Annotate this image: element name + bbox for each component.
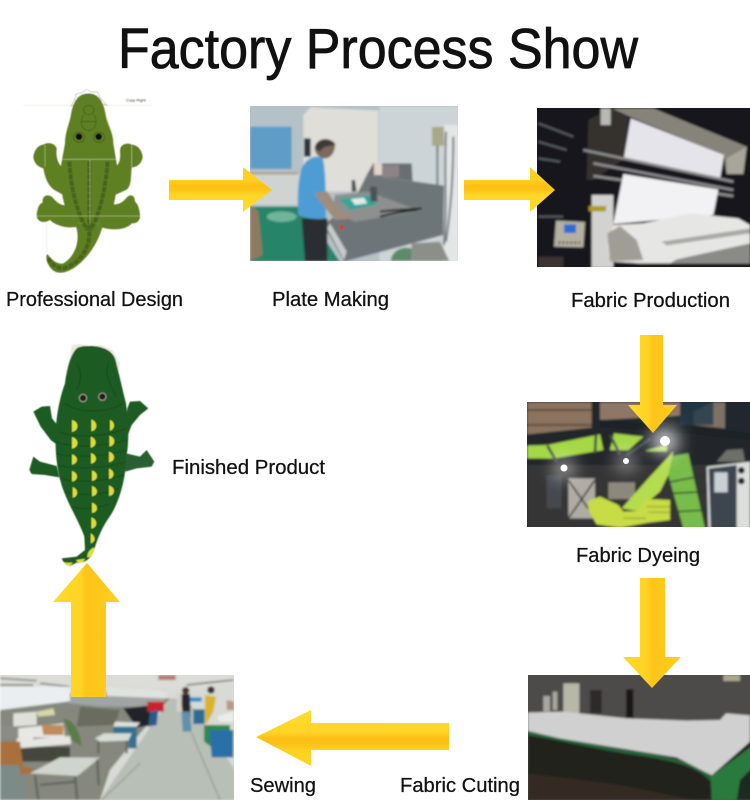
blue board: [250, 127, 292, 169]
white fabric roll: [624, 118, 724, 179]
label: sewing: Sewing: [250, 774, 316, 797]
arrow: design to plate making: [169, 167, 272, 212]
workstations left: [70, 690, 167, 707]
right lime fabric: [668, 453, 705, 528]
rollers: [583, 150, 733, 196]
lower background: [527, 465, 707, 528]
arrow: sewing to finished product: [53, 563, 120, 697]
column: [592, 195, 613, 268]
carton: [250, 205, 263, 261]
folded fabric pile: [607, 213, 750, 263]
machine side frame: [587, 108, 628, 180]
fur shading: [56, 363, 127, 508]
left white wall: [0, 685, 71, 710]
white fabric: [528, 712, 750, 775]
background equipment: [563, 683, 579, 713]
panel: fabric dyeing photo: [527, 402, 750, 527]
workers: [180, 694, 191, 718]
head spikes: [65, 344, 120, 375]
panel: professional design crocodile: [23, 89, 152, 273]
floor: [100, 698, 235, 800]
label: professional design: Professional Design: [6, 288, 183, 311]
right rear leg: [125, 450, 154, 472]
crocodile body: [33, 93, 143, 273]
panel: fabric production photo: [530, 100, 750, 270]
lime fabric overhead: [527, 434, 603, 458]
body: [29, 346, 148, 566]
guide lines and copyright: [23, 97, 152, 253]
workstations zone: [0, 698, 170, 800]
small table: [95, 733, 132, 742]
body guide lines: [37, 145, 140, 223]
face: [73, 105, 105, 142]
beams: [600, 420, 603, 422]
scales: [48, 162, 108, 268]
man: [302, 218, 327, 262]
right side crates: [190, 697, 202, 702]
eyes: [79, 392, 107, 402]
label: fabric dyeing: Fabric Dyeing: [576, 544, 700, 567]
green floor: [250, 207, 340, 262]
panel: finished crocodile product: [29, 344, 154, 566]
label: plate making: Plate Making: [272, 288, 389, 311]
side highlights: [66, 110, 113, 133]
right wall: [379, 106, 459, 263]
arrow: cutting to sewing: [256, 710, 449, 766]
lime sheet: [622, 452, 673, 511]
panel: plate making photo: [250, 106, 458, 261]
dark fabric stack: [528, 732, 750, 800]
work platform: [332, 192, 417, 222]
guide lines and copyright: Copy Right: [126, 97, 147, 102]
main table: [30, 757, 100, 776]
yellow spines: [64, 419, 114, 566]
title: Factory Process Show: [118, 17, 639, 81]
control panel: [554, 221, 585, 247]
machine: [707, 462, 750, 528]
lights: [555, 428, 678, 477]
panel: sewing workshop photo: [0, 670, 237, 800]
ceiling: [0, 675, 235, 690]
white fabric sheet: [613, 174, 718, 224]
green edge: [528, 733, 712, 780]
arrow: dyeing to cutting: [623, 578, 681, 688]
roof: [527, 402, 592, 434]
motor: [391, 248, 412, 261]
label: finished product: Finished Product: [172, 456, 325, 479]
head spikes: [71, 89, 107, 106]
stools and table: [0, 742, 33, 777]
fabric stacks: [588, 497, 670, 528]
overhead beam: [612, 108, 747, 174]
tall white partition: [303, 107, 378, 192]
blue crates: [113, 727, 137, 748]
label: fabric production: Fabric Production: [571, 289, 730, 312]
arrow: fabric production to dyeing: [628, 335, 677, 433]
machine: [327, 175, 444, 262]
label: fabric cutting: Fabric Cuting: [400, 774, 520, 797]
switch box and cables: [432, 127, 444, 146]
panel: fabric cutting photo: [520, 670, 750, 800]
arrow: plate making to fabric production: [464, 167, 555, 212]
